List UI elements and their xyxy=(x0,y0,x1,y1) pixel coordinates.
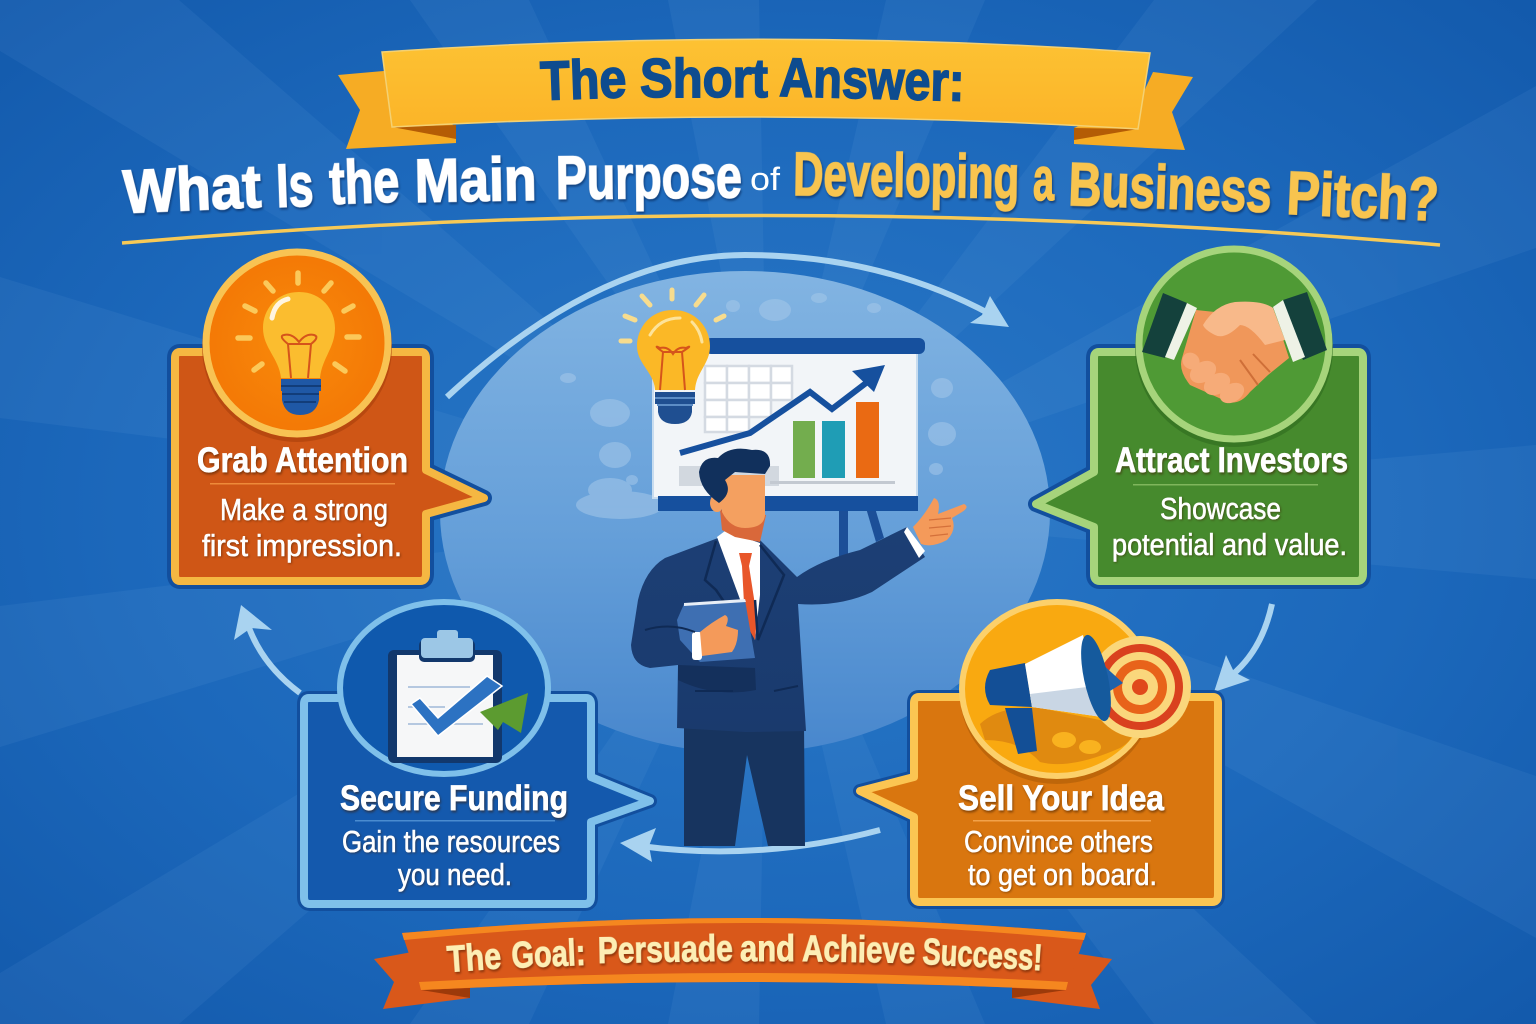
ribbon title text: Short xyxy=(640,47,768,109)
lapels xyxy=(705,541,784,640)
main headline xyxy=(122,140,1440,234)
panel: secure funding xyxy=(304,602,650,904)
presenter xyxy=(631,449,967,846)
bar: teal xyxy=(822,421,845,478)
description: to get on board. xyxy=(968,857,1157,892)
heading: Attract Investors xyxy=(1115,441,1348,480)
icon: bulb medallion xyxy=(202,252,392,442)
ribbon left fold xyxy=(392,125,456,139)
ribbon right tail xyxy=(1074,72,1193,150)
ribbon tails xyxy=(374,952,1112,1009)
icon: handshake medallion xyxy=(1135,249,1333,447)
presentation board xyxy=(653,338,925,563)
ear xyxy=(710,494,724,512)
jacket lower shading xyxy=(678,665,756,692)
arrow: funding to attention xyxy=(234,605,300,693)
ribbon band xyxy=(402,918,1086,990)
ribbon text: Persuade xyxy=(597,928,733,971)
grey placeholder xyxy=(679,466,779,486)
main headline: the xyxy=(328,147,400,217)
arrow: investors to sell xyxy=(1214,604,1272,692)
book xyxy=(677,599,755,662)
description: first impression. xyxy=(202,528,402,563)
ribbon title text: Answer: xyxy=(779,46,965,113)
description xyxy=(202,492,402,563)
pointing hand xyxy=(904,498,967,558)
main headline: Is xyxy=(275,151,314,220)
main headline: Developing xyxy=(793,140,1020,211)
trend arrow xyxy=(680,365,885,453)
title ribbon xyxy=(338,39,1193,150)
ribbon bottom stripe xyxy=(419,973,1068,990)
divider xyxy=(1133,484,1318,486)
pocket lines xyxy=(695,686,798,691)
ribbon text xyxy=(446,928,1044,980)
trousers xyxy=(684,725,805,846)
ribbon title text xyxy=(539,46,965,113)
main headline: a xyxy=(1033,145,1055,213)
jacket xyxy=(631,527,925,732)
divider xyxy=(973,820,1151,822)
bar: orange xyxy=(856,402,879,478)
axis line xyxy=(770,481,895,484)
hair xyxy=(699,449,770,503)
table grid xyxy=(705,366,792,432)
ribbon left tail xyxy=(338,70,456,149)
icon: clipboard medallion xyxy=(340,602,548,774)
bar: green xyxy=(793,421,815,478)
cycle arrows xyxy=(234,255,1272,862)
divider xyxy=(355,820,555,822)
tie xyxy=(739,553,757,640)
description: you need. xyxy=(398,857,512,892)
shirt xyxy=(717,531,760,640)
heading: Sell Your Idea xyxy=(958,779,1164,818)
description xyxy=(1112,491,1347,562)
main headline: Main xyxy=(414,145,537,215)
ribbon top stripe xyxy=(402,918,1086,940)
bottom ribbon xyxy=(374,918,1112,1009)
left cuff and hand xyxy=(692,615,738,660)
panel: grab attention xyxy=(175,252,484,581)
ribbon text: The xyxy=(446,935,502,980)
board top bar xyxy=(705,338,925,354)
main headline: of xyxy=(750,161,780,197)
panel shape xyxy=(860,697,1218,902)
board surface xyxy=(653,352,917,498)
ribbon right fold xyxy=(1074,128,1138,140)
face xyxy=(721,475,765,528)
main headline: What xyxy=(122,152,262,226)
icon: megaphone medallion xyxy=(960,602,1191,784)
neck xyxy=(720,510,766,542)
description: Convince others xyxy=(964,824,1153,859)
ribbon text: Success! xyxy=(922,931,1044,978)
left arm crease xyxy=(645,626,695,632)
panel shape xyxy=(175,352,484,581)
description xyxy=(964,824,1157,892)
main headline: Purpose xyxy=(556,142,742,212)
headline underline xyxy=(122,215,1440,245)
main headline: Pitch? xyxy=(1285,159,1440,234)
ribbon text: Achieve xyxy=(802,928,916,971)
description: Showcase xyxy=(1160,491,1281,526)
arrow: top arc to investors xyxy=(447,255,1009,397)
central spotlight ellipse xyxy=(440,271,1050,753)
heading: Grab Attention xyxy=(197,441,408,480)
arrow: sell to funding xyxy=(620,828,880,862)
board bottom bar xyxy=(658,496,918,511)
heading: Secure Funding xyxy=(340,779,568,818)
panel: sell your idea xyxy=(860,602,1218,902)
ribbon text: and xyxy=(740,928,795,969)
easel legs xyxy=(839,508,884,563)
icon: central light bulb xyxy=(621,290,724,424)
ribbon folds xyxy=(421,988,1066,998)
ribbon title text: The xyxy=(539,47,627,112)
description: potential and value. xyxy=(1112,527,1347,562)
divider xyxy=(210,483,395,484)
panel shape xyxy=(1036,352,1363,581)
panel: attract investors xyxy=(1036,249,1363,581)
ribbon main band xyxy=(382,39,1150,129)
ribbon text: Goal: xyxy=(511,932,586,976)
description xyxy=(342,824,560,892)
description: Gain the resources xyxy=(342,824,560,859)
main headline: Business xyxy=(1068,150,1273,225)
panel shape xyxy=(304,698,650,904)
description: Make a strong xyxy=(220,492,388,527)
